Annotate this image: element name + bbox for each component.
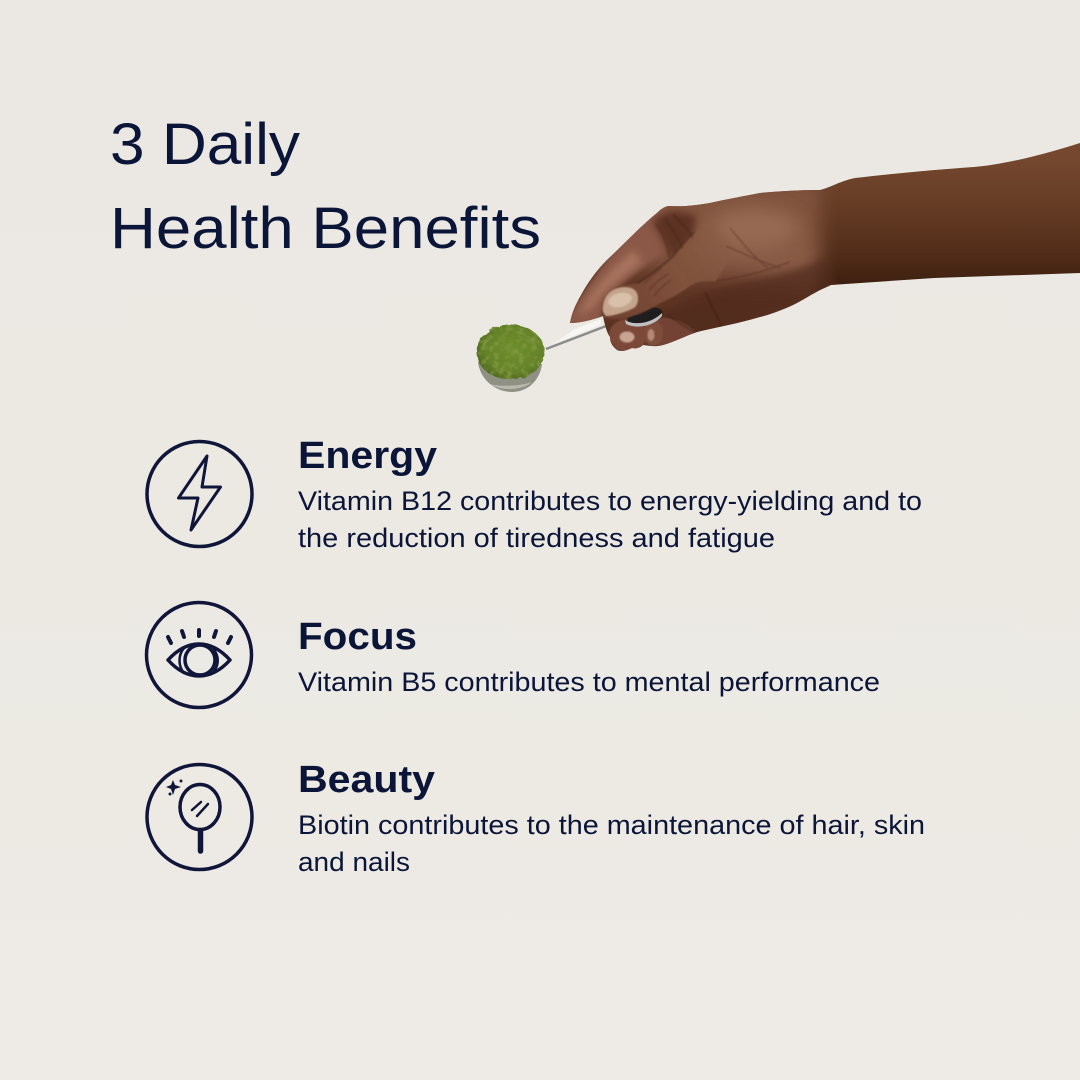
hand base xyxy=(570,188,829,351)
thumb wrinkles xyxy=(644,228,790,296)
spoon handle xyxy=(546,320,622,349)
text: focus description: Vitamin B5 contributes to mental performance xyxy=(298,667,880,697)
thumb nail xyxy=(603,287,638,316)
text: energy description: Vitamin B12 contributes to energy-yielding and to xyxy=(298,486,922,516)
text: energy description: the reduction of tiredness and fatigue xyxy=(298,523,775,553)
benefit: focus xyxy=(146,602,880,708)
text: beauty description: and nails xyxy=(298,847,410,877)
index finger xyxy=(570,208,663,323)
spoon handle highlight xyxy=(553,319,601,344)
icon: eye xyxy=(146,602,252,708)
heading: focus: Focus xyxy=(298,616,417,658)
thumb edge shadow xyxy=(638,232,694,283)
forearm base xyxy=(578,143,1080,300)
text: beauty description xyxy=(298,810,925,877)
thumb xyxy=(603,218,736,319)
scoop of green powder xyxy=(476,324,544,380)
title xyxy=(110,112,541,261)
lower finger nail two xyxy=(648,329,654,341)
finger separators xyxy=(668,292,722,333)
photo: hand holding scoop of green powder xyxy=(476,130,1080,392)
finger three xyxy=(656,317,696,346)
text: energy description xyxy=(298,486,922,553)
text: beauty description: Biotin contributes to the maintenance of hair, skin xyxy=(298,810,925,840)
heading: energy: Energy xyxy=(298,435,437,477)
arm and hand xyxy=(570,143,1080,351)
thumb nail shine xyxy=(607,290,633,310)
icon: lightning bolt xyxy=(147,442,252,546)
index knuckle creases xyxy=(656,214,693,257)
palm shadow xyxy=(650,258,840,350)
heading: beauty: Beauty xyxy=(298,759,435,801)
finger one xyxy=(609,319,647,351)
title: Health Benefits xyxy=(110,196,541,261)
back of hand highlight xyxy=(711,208,799,248)
lower finger nail one xyxy=(620,332,634,342)
benefit: energy xyxy=(147,435,922,553)
finger two xyxy=(644,322,662,346)
finger highlight xyxy=(578,250,642,316)
benefit: beauty xyxy=(147,759,925,877)
title: 3 Daily xyxy=(110,112,300,177)
knuckle shade xyxy=(652,211,696,260)
spoon bowl xyxy=(478,362,542,392)
scoop handle ring xyxy=(625,304,664,328)
icon: hand mirror xyxy=(147,764,252,870)
